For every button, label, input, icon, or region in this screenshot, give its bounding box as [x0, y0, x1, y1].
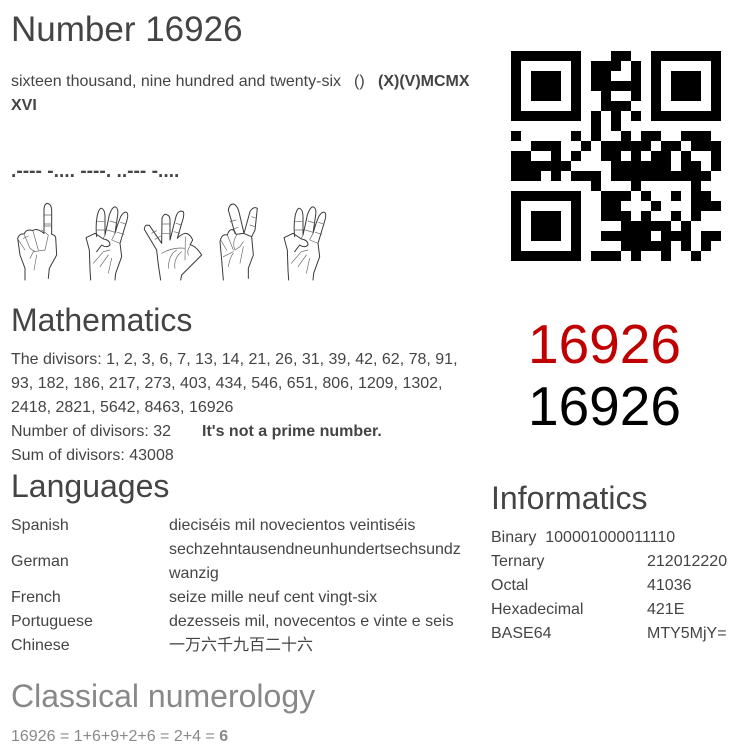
informatics table: MTY5MjY=: [647, 625, 727, 642]
divisors list: The divisors: 1, 2, 3, 6, 7, 13, 14, 21, 26, 31, 39, 42, 62, 78, 91, 93, 182, 186, 217, 273, 403, 434, 546, 651, 806, 1209, 1302, 2418, 2821, 5642, 8463, 16926: [11, 351, 458, 416]
sum of divisors: Sum of divisors: 43008: [11, 447, 174, 464]
informatics table: Hexadecimal: [491, 601, 583, 618]
icon: hand digit 2: [220, 204, 257, 280]
morse code: .---- -.... ----. ..--- -....: [11, 161, 179, 182]
number in red: 16926: [528, 313, 681, 375]
languages table: sechzehntausendneunhundertsechsundz wanzig: [169, 541, 461, 582]
informatics table: Binary 100001000011110: [491, 529, 675, 546]
informatics table: Ternary: [491, 553, 544, 570]
title: Number 16926: [11, 10, 243, 49]
informatics table: 41036: [647, 577, 692, 594]
icon: hand digit 6: [86, 207, 128, 280]
informatics table: [491, 529, 727, 642]
informatics table: BASE64: [491, 625, 551, 642]
informatics table: 421E: [647, 601, 684, 618]
numerology sum: 16926 = 1+6+9+2+6 = 2+4 = 6: [11, 728, 228, 745]
icon: hand digit 9: [144, 211, 202, 280]
number name and roman numeral: [11, 73, 470, 114]
icon: hand digit 1: [18, 203, 57, 280]
informatics table: 212012220: [647, 553, 727, 570]
languages table: Spanish: [11, 517, 69, 534]
QR code: [511, 51, 721, 261]
icon: hand digit 6 second: [284, 207, 326, 280]
languages table: dieciséis mil novecientos veintiséis: [169, 517, 415, 534]
heading: informatics: Informatics: [491, 480, 647, 516]
languages table: dezesseis mil, novecentos e vinte e seis: [169, 613, 454, 630]
prime status: It's not a prime number.: [202, 423, 382, 440]
heading: languages: Languages: [11, 468, 169, 504]
languages table: Chinese: [11, 637, 70, 654]
languages table: German: [11, 553, 69, 570]
number name and roman numeral: sixteen thousand, nine hundred and twenty-six: [11, 73, 341, 90]
number in black: 16926: [528, 375, 681, 437]
number name and roman numeral: (X)(V)MCMX: [378, 73, 470, 90]
informatics table: Octal: [491, 577, 528, 594]
number name and roman numeral: (): [354, 73, 365, 90]
number of divisors: Number of divisors: 32: [11, 423, 171, 440]
number name and roman numeral: XVI: [11, 97, 37, 114]
icon: sign language hands: [17, 202, 326, 280]
languages table: Portuguese: [11, 613, 93, 630]
languages table: [11, 517, 461, 654]
languages table: seize mille neuf cent vingt-six: [169, 589, 377, 606]
heading: classical numerology: Classical numerology: [11, 678, 315, 714]
heading: mathematics: Mathematics: [11, 302, 192, 338]
languages table: 一万六千九百二十六: [169, 637, 313, 654]
languages table: French: [11, 589, 61, 606]
